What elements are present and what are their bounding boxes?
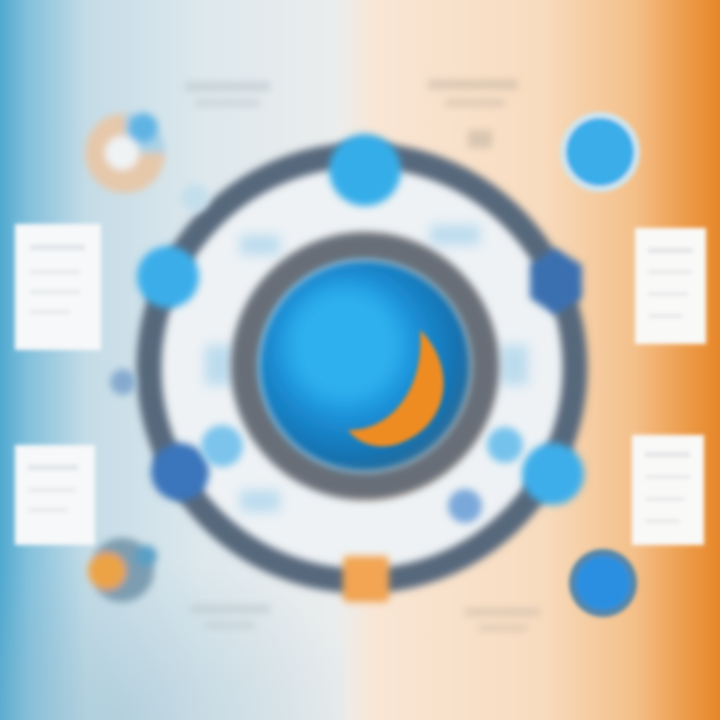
pale blue patches on band: [205, 225, 528, 512]
outer dark ring: [149, 155, 575, 581]
core highlight swirl: [287, 287, 403, 403]
white segmented band: [192, 198, 532, 538]
node: small blue lower right: [487, 427, 523, 463]
node: top blue: [329, 134, 401, 206]
heading: bottom left blurred label: [190, 605, 270, 628]
node: bottom left dark blue: [151, 443, 209, 501]
icon: bottom right blue circle: [569, 549, 637, 617]
panel: right lower card: [632, 435, 704, 545]
node: bottom orange square: [343, 556, 389, 602]
icon: top left pie chart: [85, 113, 165, 193]
heading: top right blurred label: [428, 80, 518, 148]
node: small upper left: [181, 184, 209, 212]
panel: left lower card: [15, 445, 95, 545]
panel: left upper card: [15, 224, 101, 350]
orange crescent: [348, 330, 443, 446]
heading: top left blurred label: [185, 82, 270, 106]
inner grey ring: [245, 246, 485, 486]
icon: top right blue circle: [560, 112, 640, 192]
panel: right upper card: [635, 228, 706, 344]
icon: bottom left pie chart: [88, 538, 157, 602]
chart: main ring diagram: [149, 155, 575, 581]
node: left blue: [137, 246, 199, 308]
node: bottom right blue: [522, 443, 584, 505]
node: small blue bottom right: [448, 489, 482, 523]
bottom left background shade: [0, 500, 345, 720]
blue core: [259, 260, 471, 472]
heading: bottom right blurred label: [465, 608, 540, 631]
node: small left of ring: [110, 369, 136, 395]
node: right dark blue hexagon: [530, 248, 582, 315]
node: small blue lower left: [201, 425, 243, 467]
